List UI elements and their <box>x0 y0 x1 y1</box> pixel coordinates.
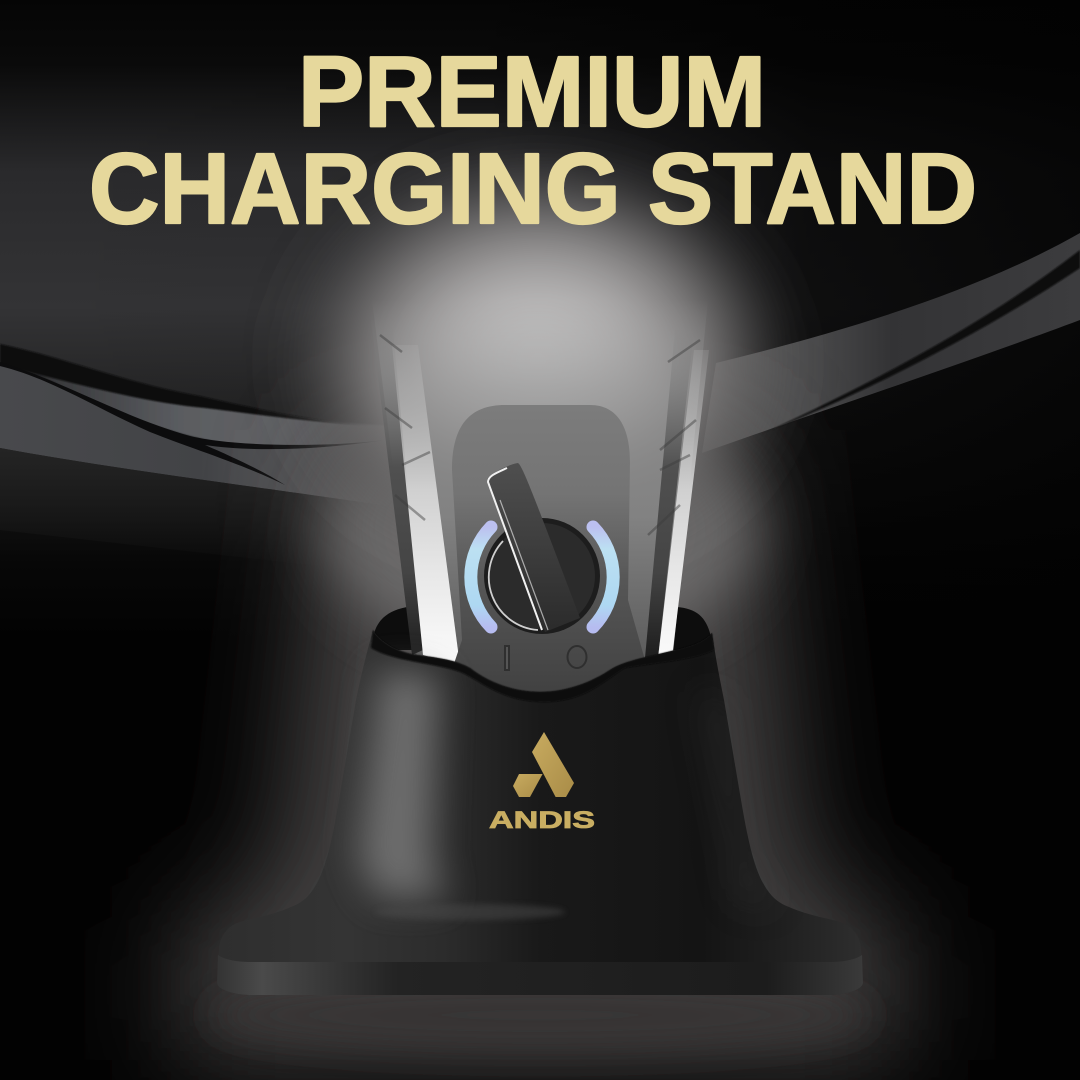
stand body and foot <box>217 630 863 995</box>
crease <box>757 250 1080 436</box>
blue LED left <box>471 527 491 627</box>
left blade dark strip <box>371 320 423 655</box>
switch panel <box>440 405 645 705</box>
dial <box>484 518 600 634</box>
Andis wordmark: ANDIS <box>489 807 595 834</box>
clipper housing <box>372 300 708 665</box>
clipper side glow <box>325 405 755 655</box>
lower ribbon <box>0 362 400 508</box>
highlight tail <box>375 904 565 920</box>
left blade white strip <box>392 345 460 666</box>
right edge shade <box>700 690 775 905</box>
left notches <box>380 335 430 520</box>
top light <box>283 155 793 565</box>
lower ribbon soft shadow <box>0 448 400 575</box>
stand back rim <box>372 607 713 650</box>
I O marks <box>505 646 586 670</box>
foot side <box>217 955 863 995</box>
upper ribbon <box>0 345 400 446</box>
title: CHARGING STAND <box>89 133 977 245</box>
left highlight <box>358 670 445 898</box>
ribbon body <box>702 233 1080 453</box>
lower crease <box>0 362 385 485</box>
glow behind the stand <box>180 155 900 1060</box>
lip shadow <box>371 630 714 702</box>
right notches <box>648 340 700 535</box>
title <box>89 36 977 245</box>
right silk wave <box>702 233 1080 453</box>
top crease <box>0 344 385 426</box>
blue LED right <box>593 527 613 627</box>
charging stand <box>217 630 863 995</box>
lever <box>487 463 580 632</box>
Andis logo mark <box>513 732 574 797</box>
clipper <box>371 300 709 705</box>
right blade white strip <box>658 350 709 658</box>
title: PREMIUM <box>298 36 766 148</box>
left silk wave <box>0 344 400 575</box>
right blade dark strip <box>645 330 694 658</box>
